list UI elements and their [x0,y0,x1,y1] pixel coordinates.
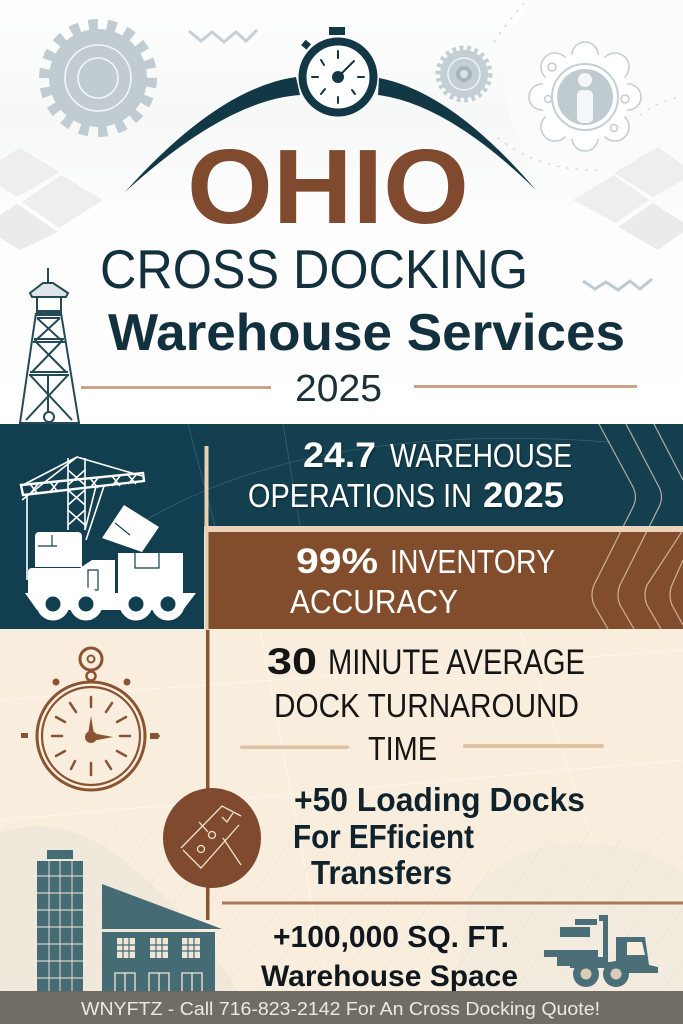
stat: 30 minute dock turnaround: 30 [267,641,317,682]
icon: crane and truck [21,457,196,616]
header background [0,0,683,424]
stat: 100,000 sq ft: +100,000 SQ. FT. [273,919,509,954]
stat: 99% inventory accuracy: ACCURACY [290,583,458,620]
squiggle right [583,279,652,290]
title: Cross Docking: CROSS DOCKING [100,238,528,300]
stat: 30 minute dock turnaround: TIME [368,730,437,767]
icon: lighthouse tower [19,268,80,423]
background hills [0,825,683,1024]
stat: 30 minute dock turnaround: DOCK TURNAROUND [274,687,579,724]
stat: 100,000 sq ft: Warehouse Space [261,960,518,993]
title: Warehouse Services: Warehouse Services [108,304,625,362]
title: year: 2025 [295,368,382,410]
stat: 24.7 warehouse operations: 24.7 [303,436,376,475]
band separator [204,526,683,532]
panel: brown band [207,532,683,629]
icon: delivery truck [544,915,658,987]
panel: beige lower section [0,629,683,1024]
stat: 50 loading docks [293,781,585,891]
stat: 50 loading docks: Transfers [311,854,452,891]
stat: 24.7 warehouse operations: WAREHOUSE [390,437,572,474]
squiggle top [189,30,257,42]
stat: 50 loading docks: +50 Loading Docks [294,781,585,818]
icon: brown circle ticket [163,788,261,888]
icon: large gear [45,25,151,131]
stat: 24.7 warehouse operations: 2025 [483,476,564,515]
decorative diamonds right [573,147,683,250]
timeline vertical line [204,446,208,630]
decorative diamonds left [0,148,103,250]
icon: brown stopwatch [21,648,160,790]
icon: small gear [438,48,490,100]
stat: 30 minute dock turnaround [267,641,585,767]
footer text: WNYFTZ - Call 716-823-2142 For An Cross Docking Quote! [81,998,600,1019]
stat: 24.7 warehouse operations [248,436,572,515]
stat: 100,000 sq ft [261,919,518,993]
icon: tower building [37,850,83,992]
footer bar [0,991,683,1024]
dotted decorative arcs [490,3,683,170]
panel: teal band [204,424,683,526]
title: OHIO: OHIO [187,128,469,246]
stat: 99% inventory accuracy: 99% [296,542,378,581]
chevrons [592,424,683,629]
panel: dark teal left [0,424,204,629]
swoosh arc [125,77,536,192]
faint band lines [130,424,610,530]
stat: 30 minute dock turnaround: MINUTE AVERAGE [328,643,585,682]
icon: info person flower [529,42,641,151]
stat: 99% inventory accuracy [290,542,555,620]
faint grid [0,630,683,1000]
icon: header stopwatch [301,27,374,112]
icon: warehouse building [102,884,222,992]
stat: 99% inventory accuracy: INVENTORY [390,543,555,580]
stat: 50 loading docks: For EFficient [293,818,474,855]
stat: 24.7 warehouse operations: OPERATIONS IN [248,477,472,514]
